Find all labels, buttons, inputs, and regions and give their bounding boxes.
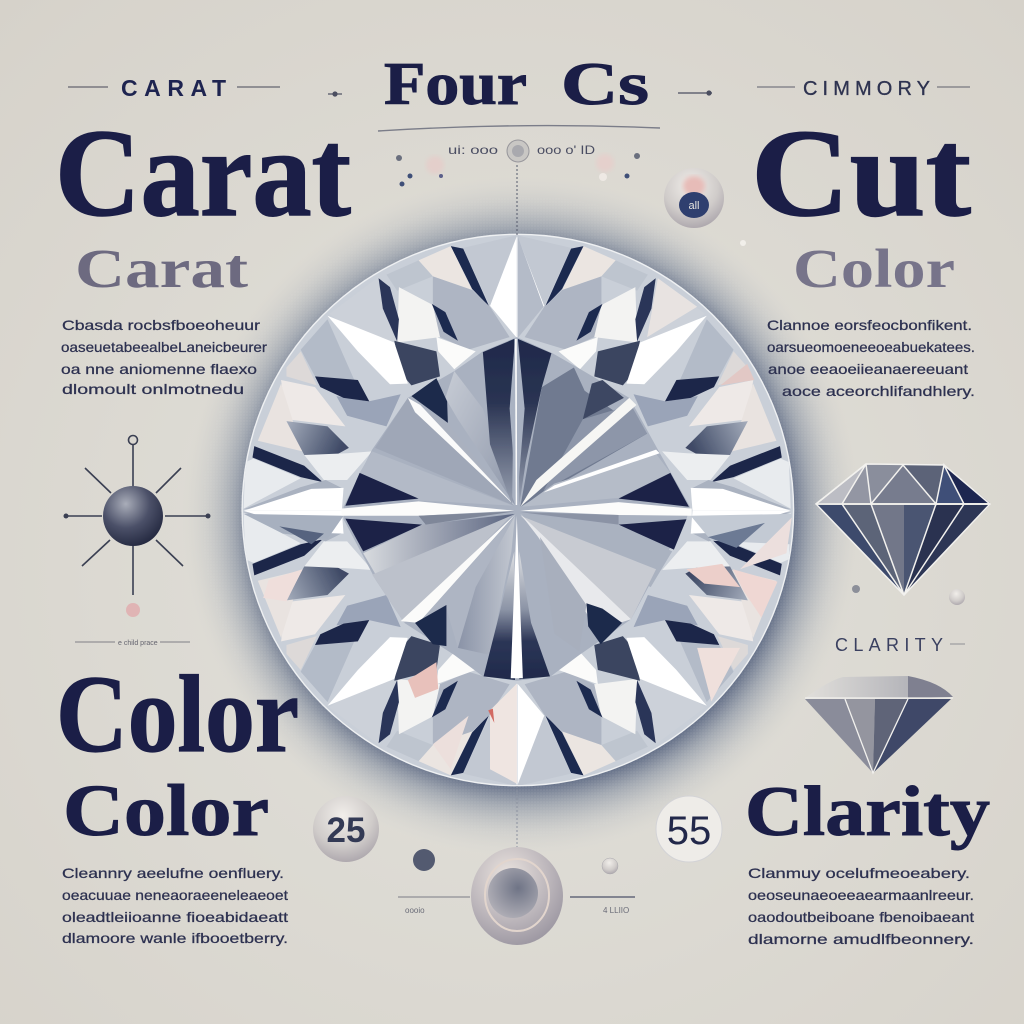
lower centre <box>458 516 515 655</box>
bottom right tick and caption <box>570 897 635 915</box>
upper right wedges <box>518 339 551 505</box>
title side ticks <box>328 91 712 96</box>
clarity small label: CLARITY <box>835 635 943 655</box>
panel: cut <box>751 78 975 399</box>
cut paragraph: anoe eeaoeiieanaereeuant <box>768 361 968 377</box>
small pearl dot <box>602 858 618 874</box>
clarity paragraph <box>748 865 974 947</box>
panel: clarity <box>745 635 990 947</box>
dark dot <box>413 849 435 871</box>
color subheading: Color <box>63 770 269 851</box>
grey dot near cut diamond <box>852 585 860 593</box>
asymmetric facets <box>518 236 544 338</box>
horizontal white bands <box>341 501 514 516</box>
carat small label: CARAT <box>121 75 226 101</box>
panel: carat <box>55 75 351 397</box>
side dark triangles <box>345 473 419 506</box>
badge: 25 <box>313 796 379 862</box>
decorative ornament row under title: ui: ooo <box>448 143 498 157</box>
icon: carat sphere with rays <box>64 436 210 617</box>
table star <box>341 337 692 681</box>
carat paragraph: dlomoult onlmotnedu <box>62 381 244 397</box>
carat paragraph: oaseuetabeealbeLaneicbeurer <box>61 339 267 355</box>
clarity main heading: Clarity <box>745 773 990 851</box>
carat paragraph: oa nne aniomenne flaexo <box>61 361 257 377</box>
color tiny label: e child prace <box>118 640 158 647</box>
lower right wedges <box>519 514 672 587</box>
top pearl: all <box>688 200 700 212</box>
bottom right tick and caption: 4 LLIIO <box>603 906 629 915</box>
title <box>378 51 660 131</box>
cut paragraph: oarsueomoeneeoeabuekatees. <box>767 339 975 355</box>
dotted bottom connector <box>516 786 518 848</box>
decorative ornament row under title <box>396 140 640 186</box>
upper left wedges <box>360 451 513 506</box>
cut paragraph: aoce aceorchlifandhlery. <box>782 383 975 399</box>
panel: color <box>56 640 299 946</box>
bottom left tick and caption <box>398 897 470 915</box>
lower left wedges <box>363 514 515 575</box>
cut paragraph <box>767 317 975 399</box>
carat paragraph: Cbasda rocbsfboeoheuur <box>62 317 260 333</box>
halo around diamond <box>182 176 862 856</box>
badge: 55 <box>656 796 722 862</box>
color paragraph: Cleannry aeelufne oenfluery. <box>62 865 284 881</box>
badge: 55: 55 <box>667 809 711 853</box>
color subheading: Color <box>793 238 955 299</box>
bottom left tick and caption: oooio <box>405 906 425 915</box>
pearl dot near cut diamond <box>949 589 965 605</box>
clarity paragraph: oaodoutbeiboane fbenoibaeant <box>748 909 974 925</box>
clarity paragraph: Clanmuy ocelufmeoeabery. <box>748 865 970 881</box>
clarity paragraph: dlamorne amudlfbeonnery. <box>748 931 974 947</box>
top pearl <box>664 168 724 228</box>
color paragraph <box>62 865 288 946</box>
icon: cut diamond side view <box>816 464 990 595</box>
dotted top connector <box>516 165 518 236</box>
carat main heading: Carat <box>55 105 351 243</box>
color paragraph: oleadtleiioanne fioeabidaeatt <box>62 909 288 925</box>
central round brilliant diamond <box>240 230 800 790</box>
carat subheading: Carat <box>75 238 249 299</box>
color paragraph: dlamoore wanle ifbooetberry. <box>62 930 288 946</box>
icon: clarity diamond <box>805 676 953 773</box>
centre vertical spike <box>510 339 525 505</box>
title: Cs <box>561 51 649 117</box>
title: Four <box>384 51 527 117</box>
large bottom pearl <box>471 847 563 945</box>
cut small label: CIMMORY <box>803 78 930 100</box>
color main heading: Color <box>56 653 299 775</box>
badge: 25: 25 <box>327 811 365 850</box>
decorative ornament row under title: ooo o' ID <box>537 143 595 157</box>
color tiny label <box>75 640 190 647</box>
cut paragraph: Clannoe eorsfeocbonfikent. <box>767 317 972 333</box>
cut main heading: Cut <box>751 105 971 243</box>
clarity paragraph: oeoseunaeoeeaearmaanlreeur. <box>748 887 974 903</box>
carat paragraph <box>61 317 267 397</box>
color paragraph: oeacuuae neneaoraeeneleaeoet <box>62 887 288 903</box>
